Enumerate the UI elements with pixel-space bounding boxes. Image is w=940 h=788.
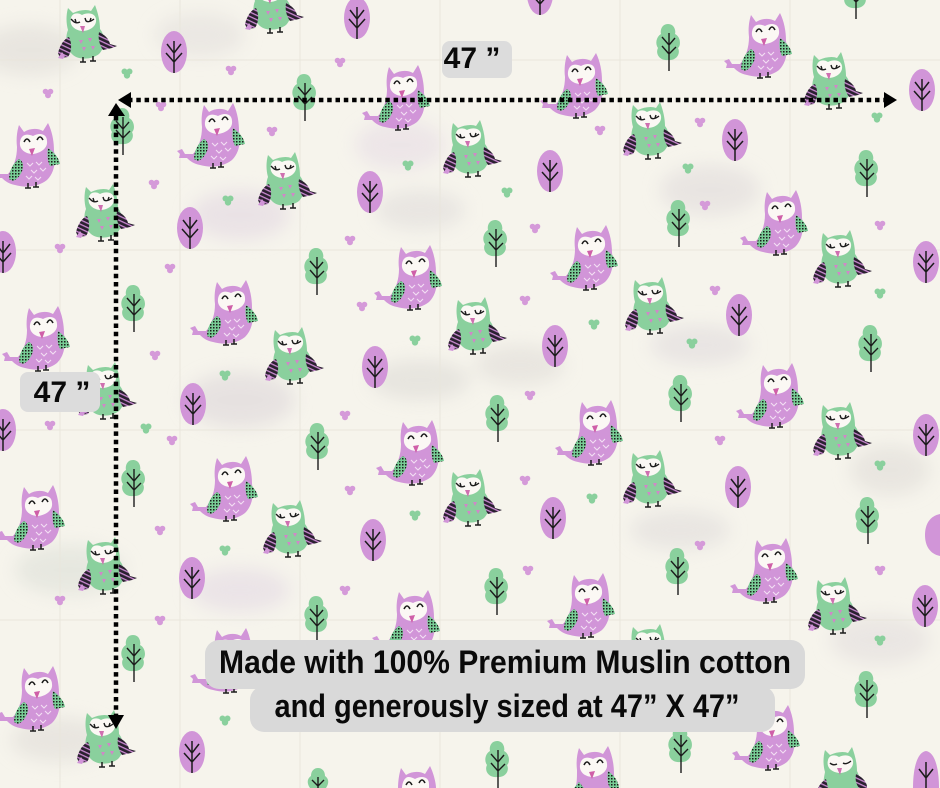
small flowers — [43, 58, 885, 726]
width label: 47 inches: 47 ” — [444, 42, 500, 75]
height label: 47 inches — [20, 372, 100, 412]
height label: 47 inches: 47 ” — [34, 376, 90, 409]
caption: fabric and size: and generously sized at 47” X 47” — [274, 688, 740, 724]
caption: fabric and size — [205, 640, 805, 732]
caption: fabric and size: Made with 100% Premium Muslin cotton — [219, 644, 791, 680]
vertical height arrow — [108, 103, 125, 729]
horizontal width arrow — [118, 92, 897, 108]
